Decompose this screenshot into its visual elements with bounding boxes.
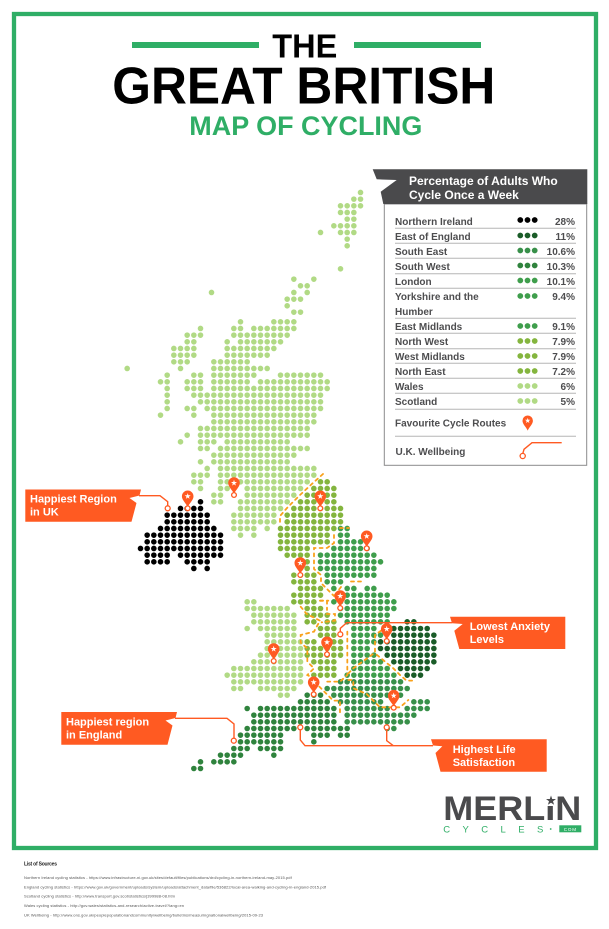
callout: Highest Life Satisfaction: Highest Life [453, 744, 516, 756]
Scotland and Wales dots [127, 192, 361, 695]
legend row: East of England [395, 232, 575, 243]
legend row: Yorkshire and the Humber: Yorkshire and the [395, 292, 479, 303]
legend row: London: 10.1% [547, 277, 575, 288]
legend header [373, 169, 587, 204]
legend row: North East [395, 367, 575, 378]
legend key: favourite cycle routes: Favourite Cycle Routes [395, 419, 507, 430]
South East dots [327, 682, 428, 728]
callout: Happiest region in England [61, 712, 236, 745]
legend panel [373, 169, 587, 465]
legend row: Scotland [395, 397, 575, 408]
legend row: Wales: 6% [561, 382, 575, 393]
legend row: East of England: 11% [556, 232, 575, 243]
legend row: North East: North East [395, 367, 446, 378]
legend row: Yorkshire and the Humber: 9.4% [552, 292, 575, 303]
list of sources: UK Wellbeing - http://www.ons.gov.uk/peoplepopulationandcommunity/wellbeing/bulletins/measuringnationalwellbeing/2015-09-23 [24, 912, 264, 918]
legend key: favourite cycle routes [395, 415, 533, 431]
callout: Lowest Anxiety Levels [338, 617, 565, 649]
legend row: South West [395, 262, 575, 273]
legend row: West Midlands: 7.9% [552, 352, 575, 363]
legend row: Wales: Wales [395, 382, 424, 393]
legend row: East Midlands: East Midlands [395, 322, 463, 333]
legend row: East Midlands [395, 322, 575, 333]
list of sources: England cycling statistics - https://www.gov.uk/government/uploads/system/uploads/attachment_data/file/536822/local-area-walking-and-cycling-in-england-2015.pdf [24, 884, 327, 889]
legend header: Percentage of Adults Who [409, 174, 558, 188]
title: MAP OF CYCLING [189, 111, 422, 141]
callout: Highest Life Satisfaction [298, 725, 547, 772]
legend row: South West: 10.3% [547, 262, 575, 273]
logo: Merlin Cycles: COM [564, 827, 577, 832]
legend row: Wales [395, 382, 575, 393]
legend row: London: London [395, 277, 432, 288]
legend row: Northern Ireland: 28% [555, 217, 575, 228]
callout: Happiest Region in UK [25, 490, 170, 522]
list of sources: List of Sources [24, 862, 57, 868]
legend row: North West: 7.9% [552, 337, 575, 348]
legend row: East of England: East of England [395, 232, 471, 243]
icons: favourite cycle route pins [182, 477, 400, 710]
callout: Highest Life Satisfaction: Satisfaction [453, 757, 515, 769]
legend row: South East: South East [395, 247, 448, 258]
legend row: North West [395, 337, 575, 348]
callout: Lowest Anxiety Levels: Levels [470, 634, 504, 646]
title: GREAT BRITISH [112, 57, 495, 115]
logo: Merlin Cycles: MERLIN [443, 790, 581, 828]
list of sources: Scotland cycling statistics - http://www.transport.gov.scot/statistics/j399988-08.htm [24, 894, 176, 899]
legend row: Northern Ireland: Northern Ireland [395, 217, 473, 228]
legend row: North West: North West [395, 337, 449, 348]
legend row: East Midlands: 9.1% [552, 322, 575, 333]
legend row: Northern Ireland [395, 217, 575, 228]
list of sources [24, 862, 327, 918]
South West dots [194, 695, 348, 768]
Yorkshire, East Midlands and London dots [321, 528, 395, 675]
callout: Happiest region in England: Happiest region [66, 716, 149, 728]
title: THE [272, 27, 337, 64]
legend row: Yorkshire and the Humber: Humber [395, 307, 433, 318]
legend row: South East [395, 247, 575, 258]
legend key: U.K. wellbeing: U.K. Wellbeing [396, 447, 465, 458]
Northern Ireland dots [141, 502, 221, 568]
logo: Merlin Cycles: CYCLES [443, 824, 543, 835]
legend row: South East: 10.6% [547, 247, 575, 258]
callout: Happiest region in England: in England [66, 729, 122, 741]
callout: Lowest Anxiety Levels: Lowest Anxiety [470, 621, 551, 633]
North East, North West and West Midlands dots [281, 482, 341, 675]
legend row: Scotland: 5% [561, 397, 575, 408]
title [112, 27, 495, 141]
legend row: Scotland: Scotland [395, 397, 437, 408]
legend row: Yorkshire and the Humber [395, 292, 575, 318]
dashed regional borders [280, 474, 415, 716]
legend key: U.K. wellbeing [396, 443, 562, 459]
legend row: West Midlands: West Midlands [395, 352, 465, 363]
legend row: North East: 7.2% [552, 367, 575, 378]
legend header: Cycle Once a Week [409, 188, 519, 202]
list of sources: Northern Ireland cycling statistics - https://www.infrastructure-ni.gov.uk/sites/default/files/publications/drd/cycling-in-northern-ireland-may-2015.pdf [24, 875, 293, 880]
list of sources: Wales cycling statistics - http://gov.wales/statistics-and-research/active-travel/?lang=en [24, 903, 184, 908]
callout: Happiest Region in UK: in UK [30, 506, 59, 518]
legend row: London [395, 277, 575, 288]
dot map of the UK [127, 192, 435, 768]
legend row: South West: South West [395, 262, 450, 273]
East of England dots [381, 622, 435, 675]
legend row: West Midlands [395, 352, 575, 363]
callout: Happiest Region in UK: Happiest Region [30, 494, 117, 506]
